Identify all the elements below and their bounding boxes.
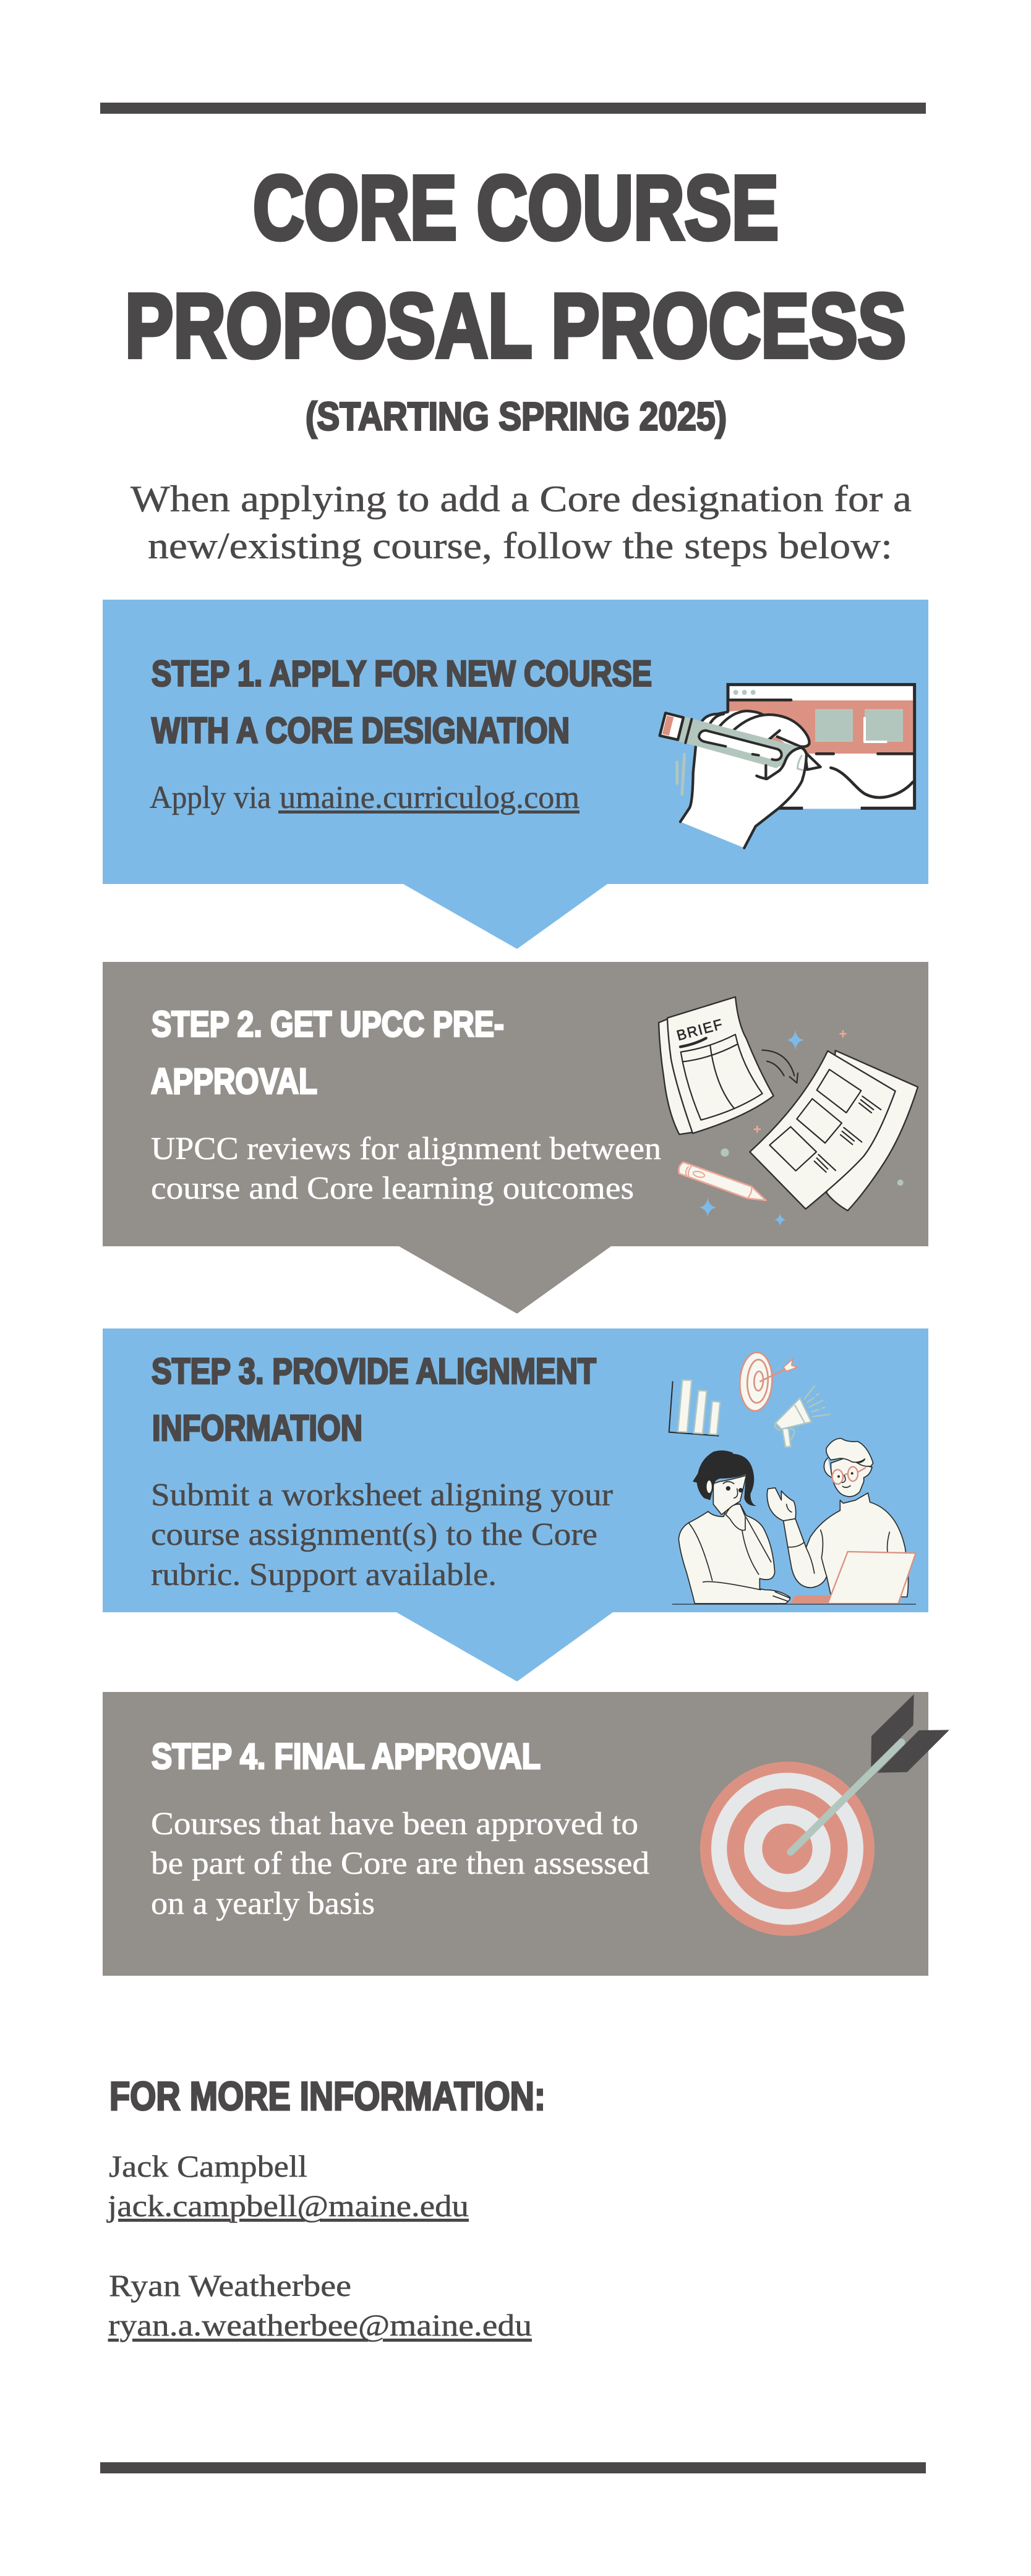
contact: Ryan Weatherbee: Ryan Weatherbee [109, 2268, 351, 2303]
man [767, 1439, 909, 1597]
step 3 body: rubric. Support available. [151, 1557, 497, 1592]
icon: hand drawing with pencil on browser window [660, 684, 915, 848]
step 1 background with arrow [103, 600, 928, 949]
panel: step 1 [103, 600, 928, 949]
contact: Ryan Weatherbee: ryan.a.weatherbee@maine.edu [108, 2308, 532, 2342]
step 1 body with link: umaine.curriculog.com [280, 780, 580, 815]
step 2 heading [151, 1004, 504, 1102]
step 4 body: on a yearly basis [151, 1886, 375, 1921]
step 3 heading: STEP 3. PROVIDE ALIGNMENT [152, 1351, 596, 1392]
panel: step 3 [103, 1328, 928, 1681]
contact: Jack Campbell: jack.campbell@maine.edu [106, 2188, 469, 2223]
step 1 body with link: Apply via [150, 780, 271, 815]
contact heading: FOR MORE INFORMATION: [109, 2073, 545, 2119]
step 3 heading: INFORMATION [152, 1408, 362, 1448]
subtitle: (STARTING SPRING 2025) [306, 394, 727, 439]
woman [678, 1476, 790, 1604]
step 4 body: be part of the Core are then assessed [151, 1846, 649, 1881]
step 3 background with arrow [103, 1328, 928, 1681]
step 2 background with arrow [103, 962, 928, 1314]
panel: step 2 [103, 962, 928, 1314]
icon: two people with laptop, chart, target and megaphone [669, 1351, 916, 1604]
step 2 heading: APPROVAL [151, 1061, 317, 1102]
step 4 background [103, 1692, 928, 1976]
panel: contact information [106, 2073, 545, 2342]
contact: Ryan Weatherbee [108, 2268, 532, 2342]
panel: step 4 [103, 1692, 949, 1976]
icon: brief documents and crayon [659, 997, 918, 1226]
intro text [130, 478, 912, 566]
step 1 heading [152, 654, 652, 750]
contact: Jack Campbell: Jack Campbell [109, 2149, 307, 2183]
step 3 body: course assignment(s) to the Core [151, 1517, 597, 1552]
icon: brief documents and crayon: BRIEF [675, 1016, 725, 1044]
step 3 heading [152, 1351, 596, 1448]
step 2 body [151, 1131, 661, 1206]
title [125, 157, 906, 377]
icon: target with arrow [700, 1694, 949, 1936]
step 3 body: Submit a worksheet aligning your [151, 1477, 613, 1513]
top rule [100, 103, 926, 114]
step 2 body: course and Core learning outcomes [151, 1171, 634, 1206]
intro text: new/existing course, follow the steps below: [148, 525, 892, 566]
contact: Jack Campbell [106, 2149, 469, 2223]
step 3 body [151, 1477, 613, 1592]
step 1 heading: WITH A CORE DESIGNATION [152, 711, 570, 750]
step 1 heading: STEP 1. APPLY FOR NEW COURSE [152, 654, 652, 694]
bottom rule [100, 2462, 926, 2473]
intro text: When applying to add a Core designation for a [130, 478, 912, 519]
step 1 body with link [150, 780, 580, 815]
step 4 body: Courses that have been approved to [151, 1806, 638, 1842]
step 2 body: UPCC reviews for alignment between [151, 1131, 661, 1167]
step 2 heading: STEP 2. GET UPCC PRE- [152, 1004, 504, 1045]
step 4 heading: STEP 4. FINAL APPROVAL [152, 1736, 541, 1777]
step 4 body [151, 1806, 649, 1921]
title: CORE COURSE [253, 157, 779, 258]
